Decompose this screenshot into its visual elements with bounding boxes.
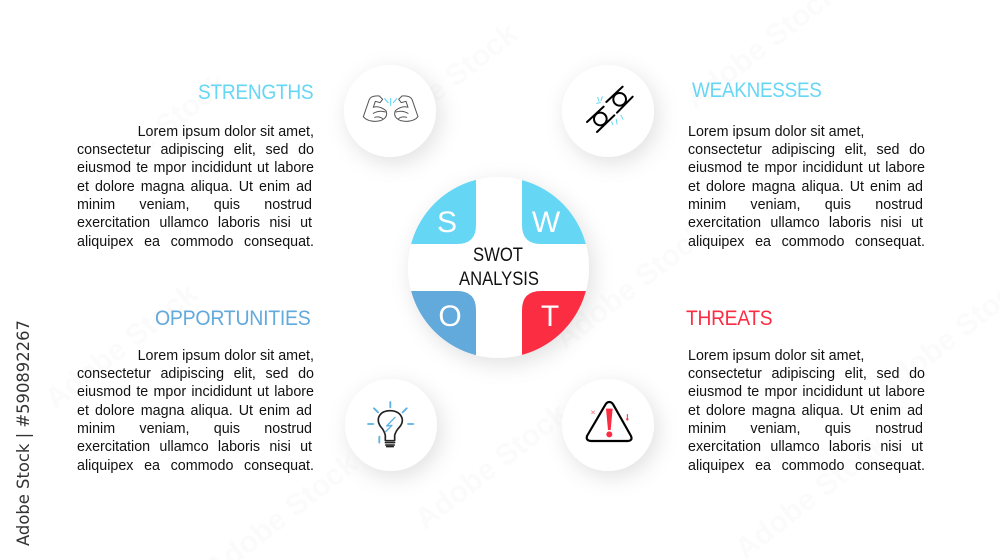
icon: warning triangle xyxy=(587,402,632,441)
quadrant O xyxy=(411,291,476,356)
text: weaknesses body xyxy=(688,124,925,250)
text: weaknesses body: Lorem ipsum dolor sit amet, xyxy=(688,124,864,140)
quadrant S xyxy=(411,180,476,244)
center title: ANALYSIS xyxy=(459,269,539,290)
letter S: S xyxy=(437,206,457,239)
heading: strengths: STRENGTHS xyxy=(198,81,313,104)
text: opportunities body: aliquipex ea commodo consequat. xyxy=(77,458,314,474)
panel: weaknesses icon circle xyxy=(562,65,654,157)
quadrant W xyxy=(522,180,586,244)
letter O: O xyxy=(438,300,462,333)
letter T: T xyxy=(541,300,559,333)
text: opportunities body: minim veniam, quis nostrud xyxy=(77,421,312,437)
text: strengths body: aliquipex ea commodo consequat. xyxy=(77,234,314,250)
text: Adobe Stock xyxy=(39,277,204,416)
icon: broken chain xyxy=(587,87,633,132)
text: Adobe Stock xyxy=(549,217,714,356)
heading: threats: THREATS xyxy=(686,307,772,330)
text: threats body: consectetur adipiscing elit, sed do xyxy=(688,366,925,382)
center title: SWOT xyxy=(473,245,523,266)
text: weaknesses body: minim veniam, quis nostrud xyxy=(688,197,923,213)
panel: threats icon circle xyxy=(562,379,654,471)
panel: opportunities icon circle xyxy=(345,379,437,471)
text: strengths body xyxy=(77,124,314,250)
text: weaknesses body: eiusmod te mpor incididunt ut labore xyxy=(688,160,925,176)
text: threats body xyxy=(688,348,925,474)
panel: central SWOT circle xyxy=(400,170,597,365)
text: opportunities body: Lorem ipsum dolor sit amet, xyxy=(138,348,314,364)
text: strengths body: exercitation ullamco laboris nisi ut xyxy=(77,215,312,231)
text: strengths body: eiusmod te mpor incididunt ut labore xyxy=(77,160,314,176)
text: threats body: exercitation ullamco laboris nisi ut xyxy=(688,439,923,455)
icon: flexed arms xyxy=(363,96,418,121)
text: threats body: Lorem ipsum dolor sit amet, xyxy=(688,348,864,364)
text: threats body: aliquipex ea commodo consequat. xyxy=(688,458,925,474)
heading: weaknesses: WEAKNESSES xyxy=(692,79,822,102)
text: opportunities body: exercitation ullamco laboris nisi ut xyxy=(77,439,312,455)
text: opportunities body xyxy=(77,348,314,474)
text: Adobe Stock xyxy=(409,397,574,536)
text: threats body: et dolore magna aliqua. Ut enim ad xyxy=(688,403,923,419)
text: weaknesses body: consectetur adipiscing elit, sed do xyxy=(688,142,925,158)
text: strengths body: minim veniam, quis nostrud xyxy=(77,197,312,213)
text: strengths body: et dolore magna aliqua. Ut enim ad xyxy=(77,179,312,195)
text: Adobe Stock xyxy=(69,67,234,206)
stock credit: Adobe Stock | #590892267 xyxy=(14,320,33,546)
text: strengths body: consectetur adipiscing elit, sed do xyxy=(77,142,314,158)
text: weaknesses body: et dolore magna aliqua. Ut enim ad xyxy=(688,179,923,195)
letter W: W xyxy=(532,206,561,239)
text: Adobe Stock xyxy=(359,17,524,156)
heading: opportunities: OPPORTUNITIES xyxy=(155,307,311,330)
text: weaknesses body: exercitation ullamco laboris nisi ut xyxy=(688,215,923,231)
text: threats body: eiusmod te mpor incididunt ut labore xyxy=(688,384,925,400)
text: strengths body: Lorem ipsum dolor sit amet, xyxy=(138,124,314,140)
text: threats body: minim veniam, quis nostrud xyxy=(688,421,923,437)
text: opportunities body: consectetur adipiscing elit, sed do xyxy=(77,366,314,382)
panel: strengths icon circle xyxy=(344,65,436,157)
quadrant T xyxy=(522,291,586,355)
text: opportunities body: et dolore magna aliqua. Ut enim ad xyxy=(77,403,312,419)
icon: light bulb xyxy=(368,402,413,447)
text: opportunities body: eiusmod te mpor incididunt ut labore xyxy=(77,384,314,400)
text: weaknesses body: aliquipex ea commodo consequat. xyxy=(688,234,925,250)
